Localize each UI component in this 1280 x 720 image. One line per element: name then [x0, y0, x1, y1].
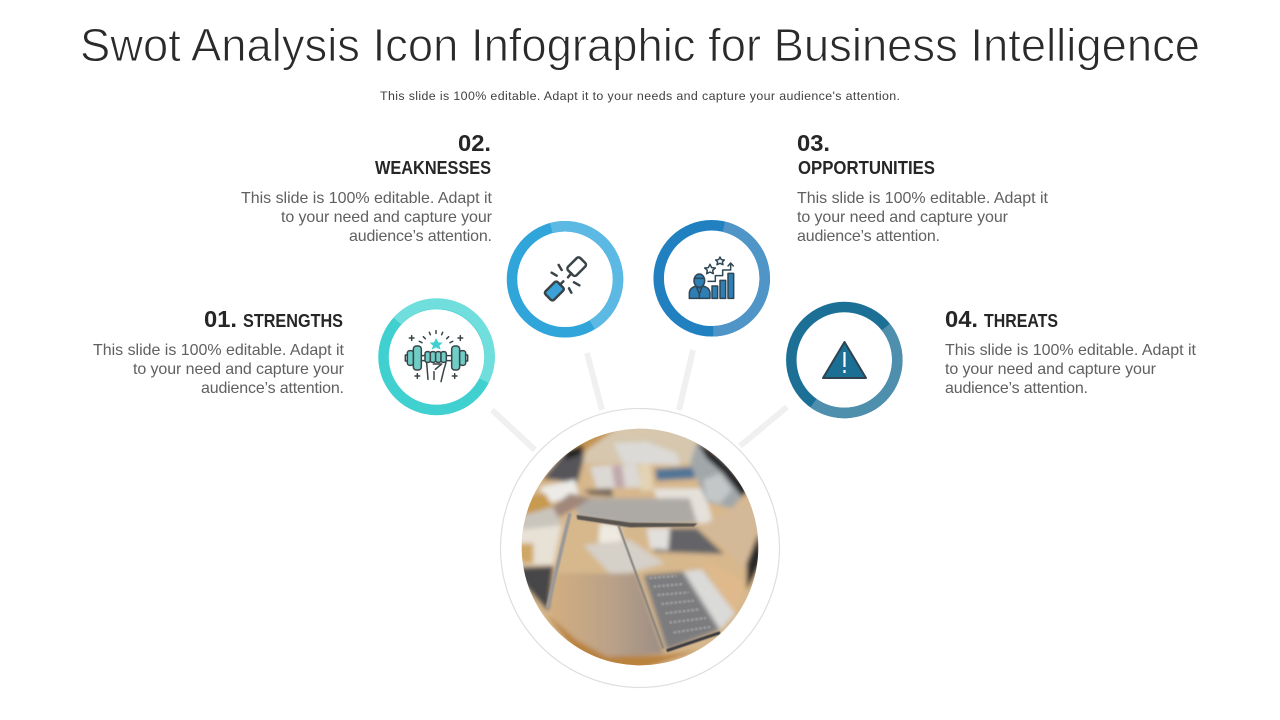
panel: weaknesses ring — [512, 226, 618, 332]
central photo with outline — [500, 408, 780, 688]
text block: strengths: audience’s attention. — [201, 380, 344, 397]
text block: opportunities: OPPORTUNITIES — [798, 157, 935, 178]
icon: fist with dumbbell — [405, 331, 468, 382]
text block: strengths: 01. — [204, 306, 237, 332]
connector spokes — [492, 350, 787, 450]
subtitle: This slide is 100% editable. Adapt it to your needs and capture your audience's attention. — [380, 89, 900, 103]
text block: strengths: This slide is 100% editable. Adapt it — [93, 342, 345, 359]
icon: person with growth chart and stars — [689, 257, 734, 298]
text block: threats: THREATS — [984, 310, 1058, 331]
text block: weaknesses: 02. — [458, 130, 491, 156]
icon: broken chain — [544, 256, 587, 301]
text block: weaknesses: This slide is 100% editable. Adapt it — [241, 190, 493, 207]
text block: weaknesses: audience’s attention. — [349, 228, 492, 245]
text block: strengths: STRENGTHS — [243, 310, 343, 331]
text block: threats: audience’s attention. — [945, 380, 1088, 397]
text block: weaknesses: to your need and capture your — [281, 209, 493, 226]
icon: warning triangle — [823, 342, 866, 378]
text block: opportunities: to your need and capture your — [797, 209, 1009, 226]
text block: threats — [945, 306, 1197, 397]
text block: weaknesses — [241, 130, 493, 245]
text block: opportunities — [797, 130, 1049, 245]
panel: opportunities ring — [659, 225, 765, 331]
panel: threats ring — [791, 307, 897, 413]
text block: threats: This slide is 100% editable. Adapt it — [945, 342, 1197, 359]
infographic canvas — [82, 28, 1198, 688]
text block: strengths — [93, 306, 345, 397]
text block: opportunities: This slide is 100% editable. Adapt it — [797, 190, 1049, 207]
photo: office desk — [522, 428, 758, 666]
text block: weaknesses: WEAKNESSES — [375, 157, 491, 178]
panel: strengths ring — [384, 304, 490, 410]
text block: threats: to your need and capture your — [945, 361, 1157, 378]
text block: strengths: to your need and capture your — [133, 361, 345, 378]
text block: threats: 04. — [945, 306, 978, 332]
text block: opportunities: 03. — [797, 130, 830, 156]
photo detail: sheet edge, screens and keyboard — [547, 513, 720, 651]
text block: opportunities: audience’s attention. — [797, 228, 940, 245]
title: Swot Analysis Icon Infographic for Business Intelligence — [80, 19, 1200, 71]
